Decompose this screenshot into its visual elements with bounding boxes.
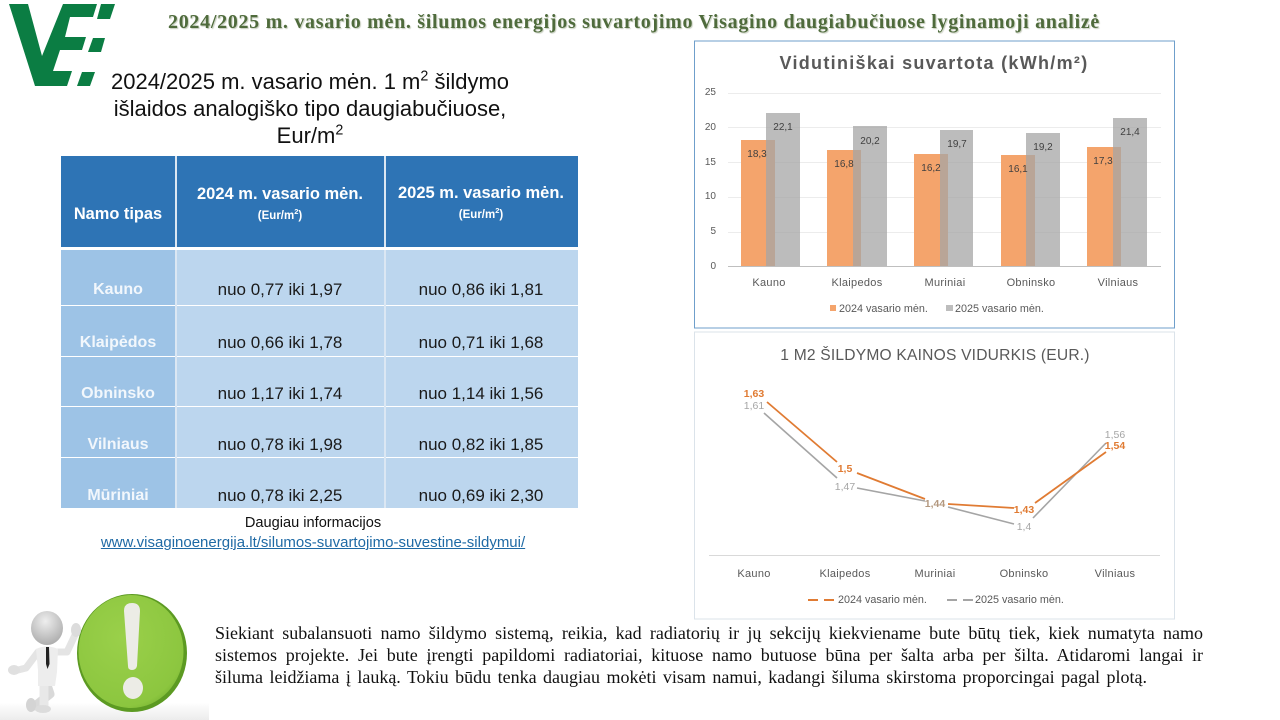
- bar chart legend: 2025 vasario mėn.: [955, 303, 1044, 315]
- gray bars 2025: [766, 113, 1147, 266]
- paragraph: explanatory note: šiluma leidžiama į lauką. Tokiu būdu tenka daugiau mokėti visam namui, kadangi šiluma skirstoma proporcingai pagal plotą.: [215, 667, 1147, 687]
- bar value labels: 19,2: [1033, 142, 1053, 153]
- line category labels: Muriniai: [915, 568, 955, 580]
- line category labels: [737, 568, 1136, 580]
- row: Vilniaus: [61, 407, 578, 457]
- paragraph: explanatory note: sistemos projekte. Jei bute įrengti papildomi radiatoriai, kituose namo butuose būna per šalta arba per šilta. Atidaromi langai ir: [215, 645, 1203, 665]
- table first-column divider: [175, 250, 177, 508]
- bar value labels: 19,7: [947, 139, 967, 150]
- y axis labels: 0: [710, 261, 716, 272]
- bar value labels: 21,4: [1120, 127, 1140, 138]
- line value labels: 1,43: [1014, 504, 1034, 516]
- line category labels: Obninsko: [1000, 568, 1048, 580]
- table column divider: [175, 156, 177, 247]
- bar value labels: [747, 122, 1140, 175]
- line value labels: 1,61: [744, 400, 764, 412]
- line value labels: 1,47: [835, 481, 855, 493]
- category labels: Klaipedos: [831, 277, 883, 289]
- line value labels: 1,54: [1105, 440, 1125, 452]
- bar value labels: 22,1: [773, 122, 793, 133]
- row: Klaipėdos: [61, 306, 578, 356]
- header: 2024: [197, 185, 363, 222]
- row: Obninsko: nuo 1,17 iki 1,74: [218, 384, 342, 403]
- y axis labels: 10: [705, 191, 716, 202]
- table second-column divider: [384, 250, 386, 508]
- row: Klaipėdos: Klaipėdos: [80, 334, 156, 351]
- header: 2025: (Eur/m2): [459, 206, 503, 221]
- paragraph: explanatory note: [215, 623, 1203, 687]
- line category labels: Vilniaus: [1095, 568, 1136, 580]
- row: Obninsko: [61, 357, 578, 406]
- line value labels: 1,63: [744, 388, 764, 400]
- row: Mūriniai: Mūriniai: [87, 487, 149, 504]
- category labels: Vilniaus: [1098, 277, 1139, 289]
- bar chart title: Vidutiniškai suvartota (kWh/m²): [779, 53, 1089, 73]
- y axis labels: [705, 87, 716, 272]
- line chart legend: 2024 vasario mėn.: [838, 594, 927, 606]
- bar value labels: 20,2: [860, 136, 880, 147]
- row: Mūriniai: nuo 0,78 iki 2,25: [218, 486, 342, 505]
- y axis labels: 15: [705, 157, 716, 168]
- title: 2024/2025 m. vasario mėn. šilumos energijos suvartojimo Visagino daugiabučiuose lyginamoji analizė: [168, 11, 1100, 33]
- logo: [9, 4, 115, 86]
- line value labels: [744, 388, 1125, 533]
- link: www.visaginoenergija.lt/silumos-suvartojimo-suvestine-sildymui/: [101, 534, 525, 551]
- row: Kauno: nuo 0,77 iki 1,97: [218, 280, 342, 299]
- bar value labels: 17,3: [1093, 156, 1113, 167]
- row: Mūriniai: nuo 0,69 iki 2,30: [419, 486, 543, 505]
- row: Vilniaus: nuo 0,78 iki 1,98: [218, 435, 342, 454]
- header: house type: Namo tipas: [74, 205, 162, 223]
- line value labels: 1,5: [838, 463, 852, 475]
- more information text: Daugiau informacijos: [245, 515, 381, 531]
- paragraph: explanatory note: Siekiant subalansuoti namo šildymo sistemą, reikia, kad radiatorių ir jų sekcijų kiekviename bute būtų tiek, kiek numatyta namo: [215, 623, 1203, 643]
- bar chart legend: 2024 vasario mėn.: [839, 303, 928, 315]
- line chart title: 1 M2 ŠILDYMO KAINOS VIDURKIS (EUR.): [780, 345, 1090, 364]
- line chart legend: 2025 vasario mėn.: [975, 594, 1064, 606]
- orange line 2024: [767, 402, 1106, 508]
- row: Klaipėdos: nuo 0,66 iki 1,78: [218, 333, 342, 352]
- line value labels: 1,4: [1017, 521, 1031, 533]
- bar value labels: 18,3: [747, 149, 767, 160]
- table heading: išlaidos analogiško tipo daugiabučiuose,: [114, 96, 506, 121]
- table column divider: [384, 156, 386, 247]
- table: heating cost: [61, 156, 578, 508]
- table heading: 2024/2025 m. vasario mėn. 1 m2 šildymo: [111, 69, 509, 94]
- row: Vilniaus: nuo 0,82 iki 1,85: [419, 435, 543, 454]
- row: Mūriniai: [61, 458, 578, 508]
- row: Vilniaus: Vilniaus: [87, 436, 149, 453]
- line category labels: Kauno: [737, 568, 771, 580]
- row: Klaipėdos: nuo 0,71 iki 1,68: [419, 333, 543, 352]
- bar value labels: 16,8: [834, 159, 854, 170]
- table heading: [111, 69, 509, 148]
- category labels: [752, 277, 1139, 289]
- category labels: Obninsko: [1007, 277, 1055, 289]
- row: Obninsko: Obninsko: [81, 385, 155, 402]
- y axis labels: 20: [705, 122, 716, 133]
- orange bars 2024: [741, 140, 1121, 266]
- row: Obninsko: nuo 1,14 iki 1,56: [419, 384, 543, 403]
- row: Kauno: [61, 250, 578, 305]
- bar chart legend: [830, 303, 1044, 315]
- header: 2025: [398, 184, 564, 221]
- y axis labels: 5: [710, 226, 716, 237]
- line chart legend: [808, 594, 1064, 606]
- y axis labels: 25: [705, 87, 716, 98]
- row: Kauno: Kauno: [93, 281, 143, 298]
- line category labels: Klaipedos: [819, 568, 871, 580]
- header: 2025: 2025 m. vasario mėn.: [398, 184, 564, 202]
- header: 2024: (Eur/m2): [258, 207, 302, 222]
- icon: person leaning on green exclamation mark: [0, 594, 209, 720]
- bar value labels: 16,1: [1008, 164, 1028, 175]
- category labels: Kauno: [752, 277, 786, 289]
- gray line 2025: [764, 413, 1106, 524]
- category labels: Muriniai: [925, 277, 965, 289]
- header: 2024: 2024 m. vasario mėn.: [197, 185, 363, 203]
- table header row: [61, 156, 578, 247]
- row: Kauno: nuo 0,86 iki 1,81: [419, 280, 543, 299]
- bar value labels: 16,2: [921, 163, 941, 174]
- line value labels: 1,44: [925, 498, 945, 510]
- line value labels: 1,56: [1105, 429, 1125, 441]
- table heading: Eur/m2: [277, 123, 343, 148]
